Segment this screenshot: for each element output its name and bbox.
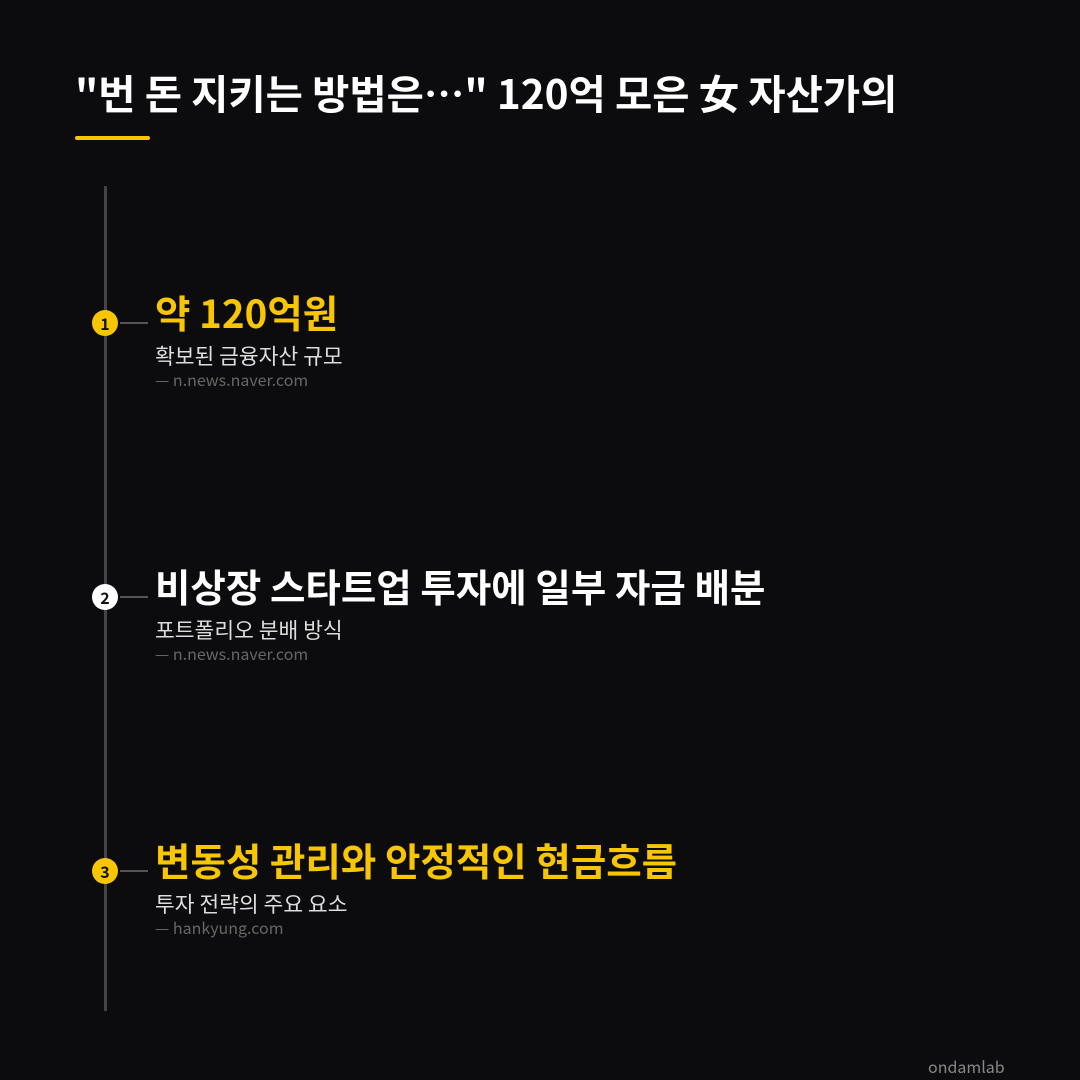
item 3 [92, 832, 677, 939]
description 2: 포트폴리오 분배 방식 [155, 614, 343, 645]
description 3: 투자 전략의 주요 요소 [155, 888, 347, 919]
item 1 [92, 284, 343, 391]
marker 1 [92, 310, 118, 336]
marker 2: 2 [100, 585, 110, 609]
marker 3 [92, 858, 118, 884]
source 3: — hankyung.com [155, 915, 284, 939]
marker 2 [92, 584, 118, 610]
timeline line [104, 186, 107, 1011]
description 1: 확보된 금융자산 규모 [155, 340, 343, 371]
marker 3: 3 [100, 859, 110, 883]
item 2 [92, 558, 765, 665]
heading 2: 비상장 스타트업 투자에 일부 자금 배분 [155, 558, 765, 614]
title underline [75, 136, 150, 140]
source 1: — n.news.naver.com [155, 367, 308, 391]
marker 1: 1 [100, 311, 110, 335]
heading 1: 약 120억원 [155, 284, 338, 340]
source 2: — n.news.naver.com [155, 641, 308, 665]
heading 3: 변동성 관리와 안정적인 현금흐름 [155, 832, 677, 888]
brand: ondamlab [928, 1054, 1005, 1078]
title: "번 돈 지키는 방법은…" 120억 모은 女 자산가의 [75, 62, 897, 121]
